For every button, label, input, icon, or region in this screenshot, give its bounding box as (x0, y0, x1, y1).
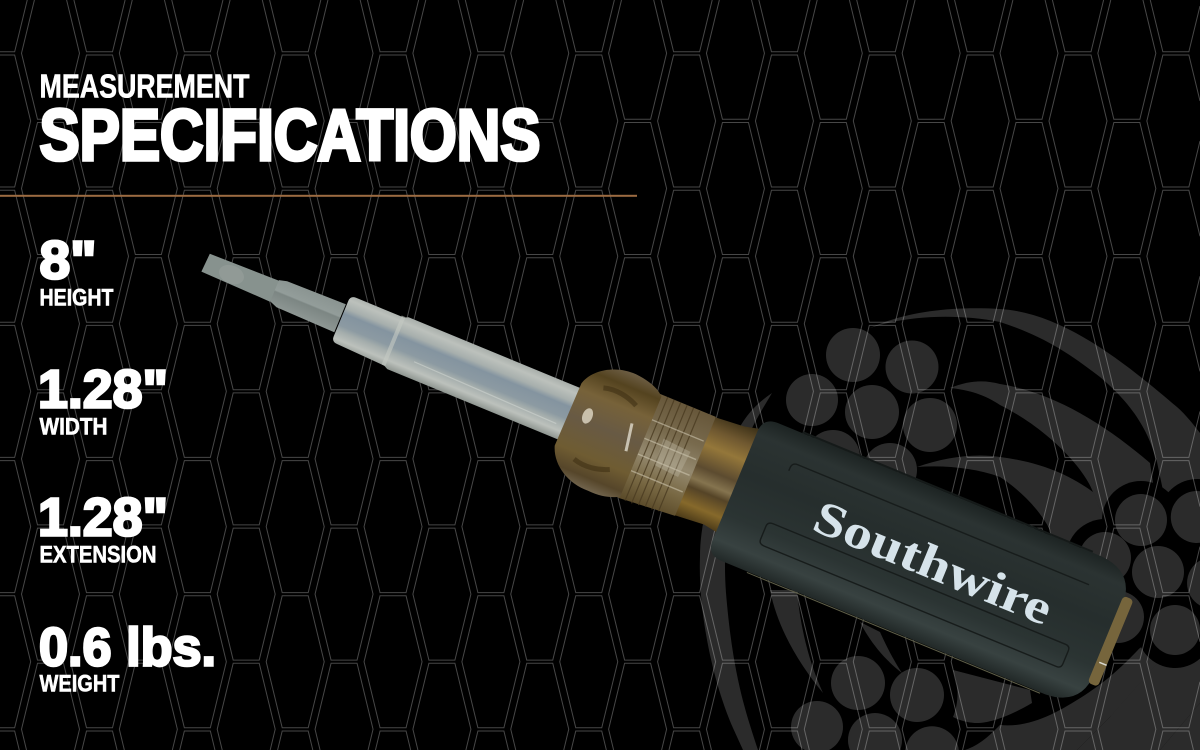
recessed panels (759, 462, 1095, 668)
screwdriver (175, 197, 1145, 713)
spec: weight: 0.6 lbs. (39, 618, 216, 678)
ribbed section (616, 393, 716, 520)
divider (0, 195, 637, 197)
spec: height: HEIGHT (40, 285, 114, 312)
spec: weight: WEIGHT (40, 671, 120, 698)
spec: height (40, 231, 114, 312)
rubber handle (706, 416, 1137, 710)
spec: width: WIDTH (40, 414, 108, 441)
logo watermark (700, 308, 1200, 750)
bronze collar (670, 408, 770, 538)
subtitle: MEASUREMENT (40, 68, 250, 105)
clear bulb (544, 356, 666, 503)
title: SPECIFICATIONS (40, 96, 540, 176)
bronze end cap (1088, 596, 1134, 687)
spec: width: 1.28" (38, 360, 168, 420)
spec: extension: EXTENSION (40, 542, 156, 569)
bit blade (201, 252, 282, 303)
bit hex shank (269, 277, 346, 332)
spec: extension: 1.28" (38, 488, 168, 548)
shaft sleeve (330, 294, 581, 440)
black halos around the right dot cluster (1066, 479, 1200, 668)
brand logo text: Southwire (806, 490, 1060, 636)
spec: height: 8" (40, 231, 96, 291)
